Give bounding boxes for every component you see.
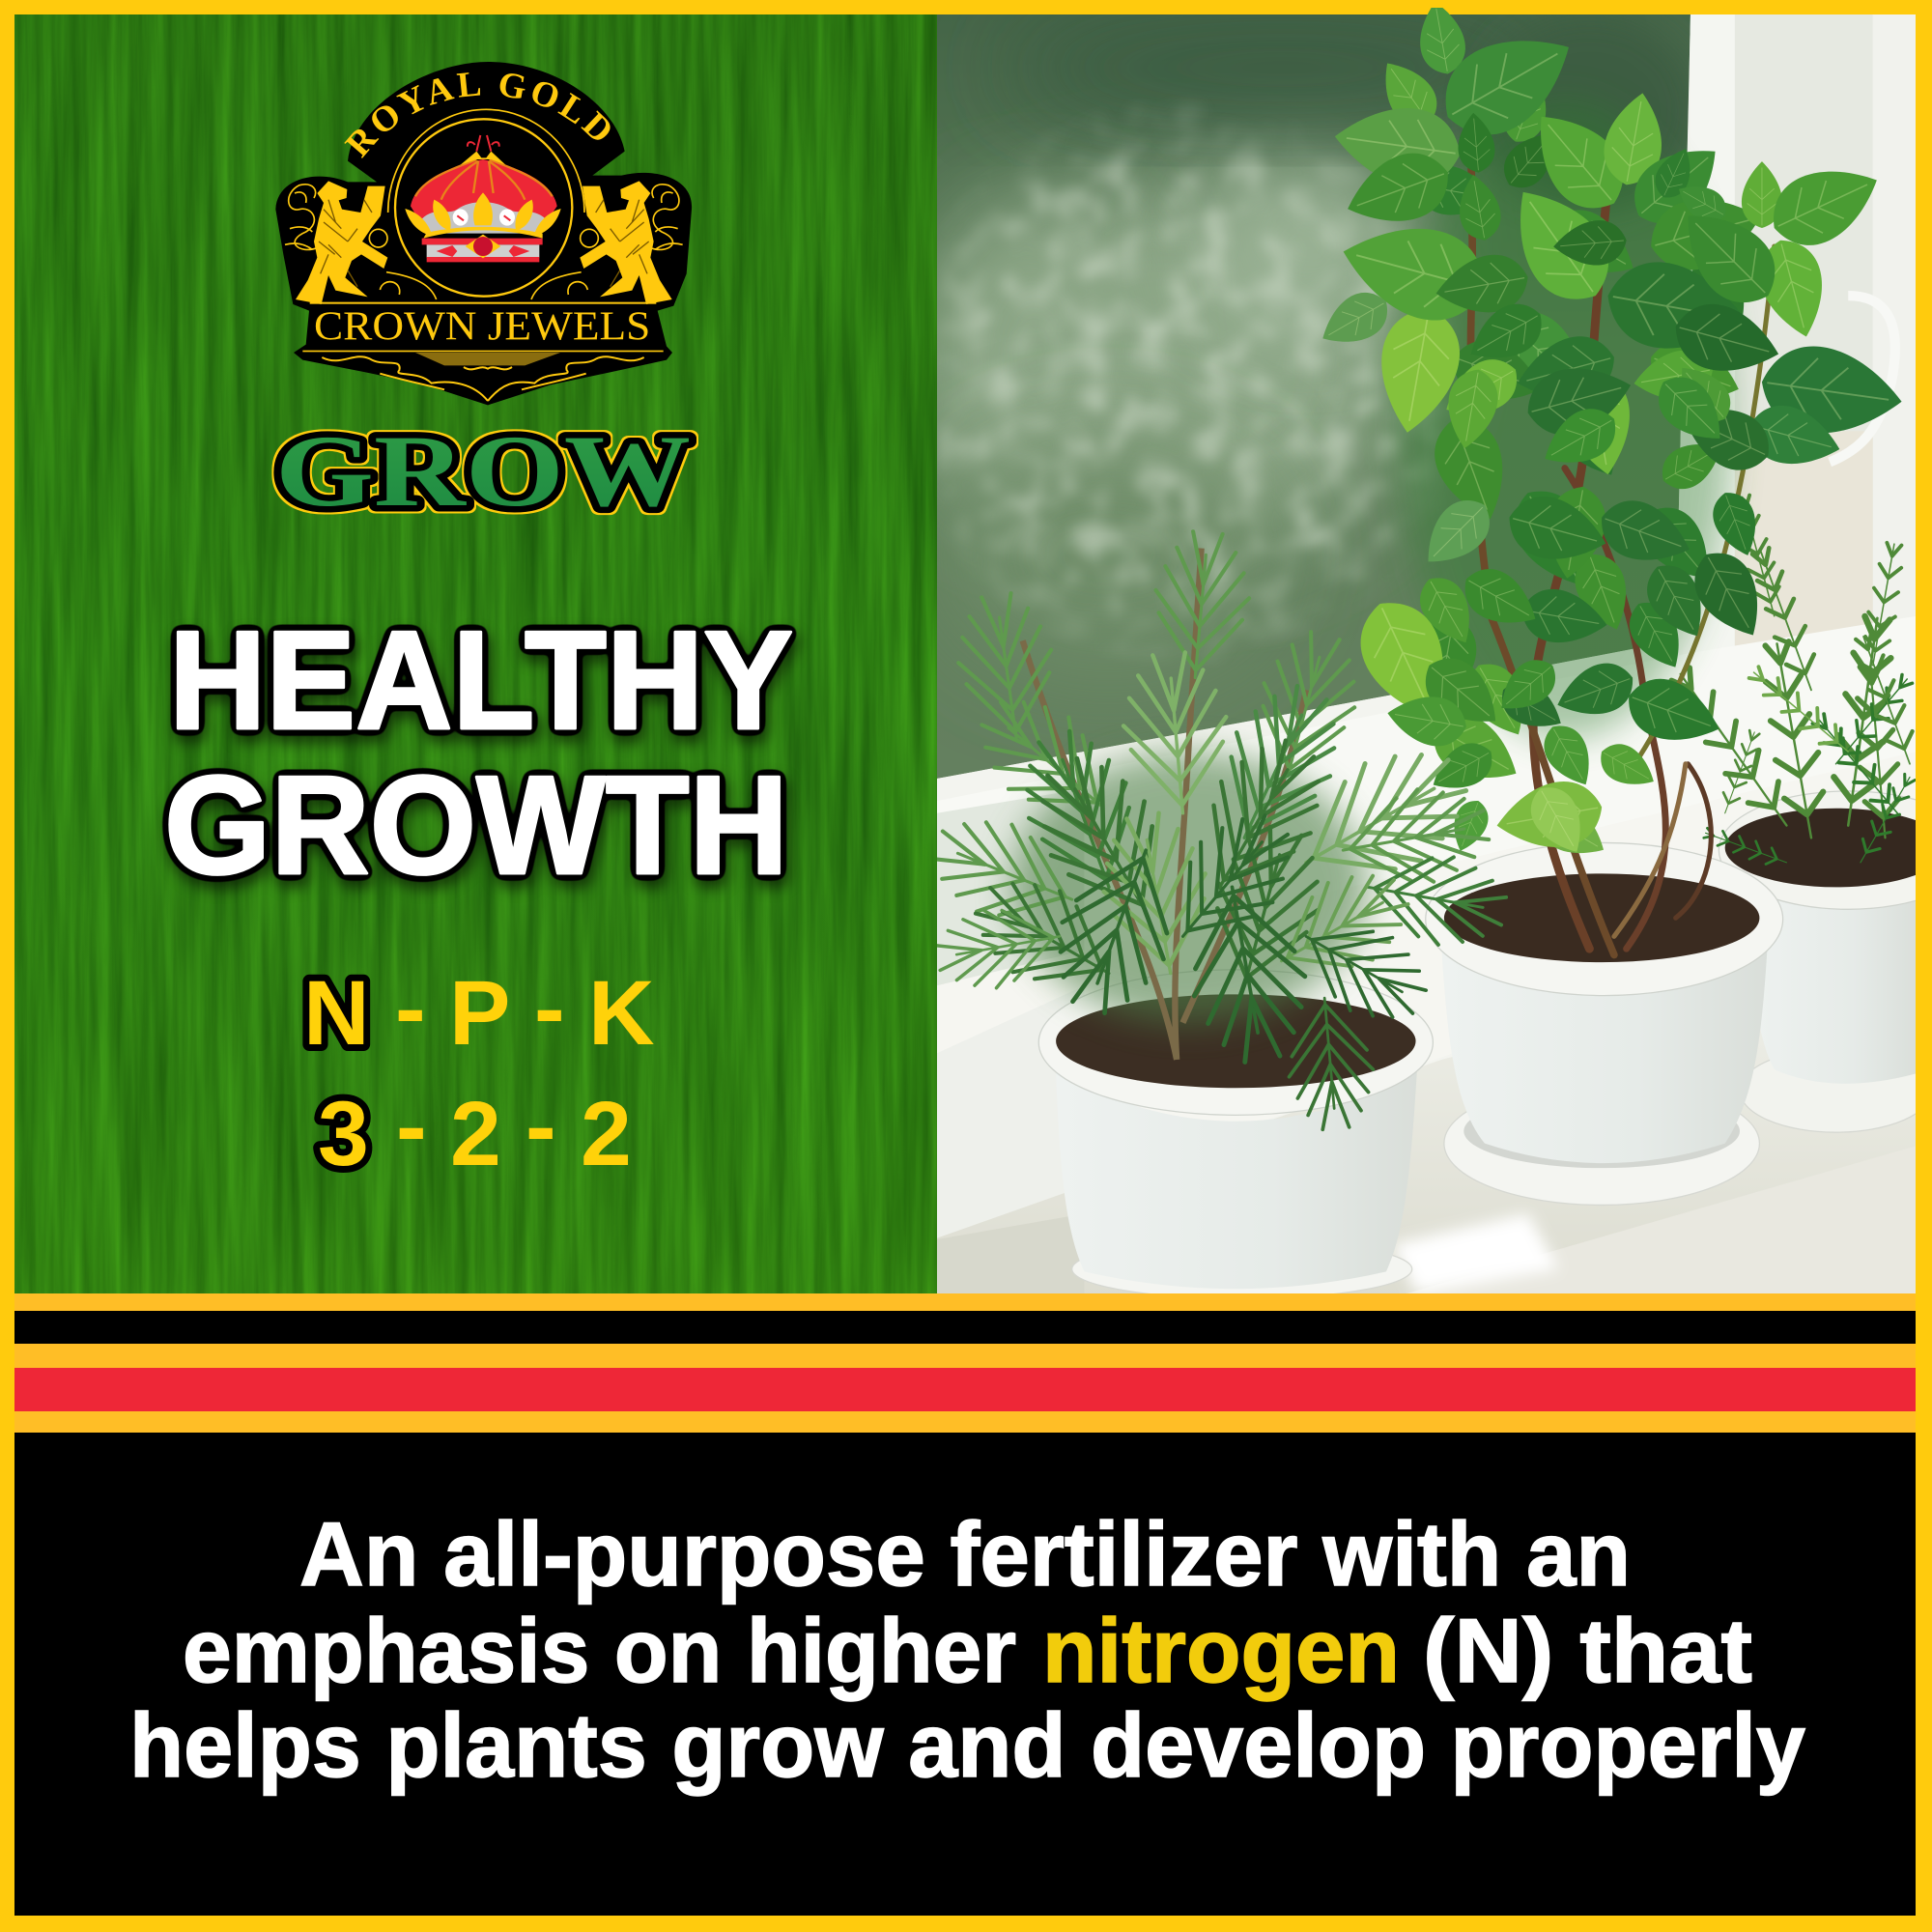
- heading: HEALTHY GROWTH: HEALTHY: [169, 602, 793, 758]
- NPK ratio: 2: [581, 1083, 632, 1185]
- right lion: [531, 181, 683, 304]
- plant: mint backing mass: [1399, 99, 1731, 739]
- plant: thyme: [1663, 494, 1924, 871]
- logo divider rules: [302, 302, 664, 352]
- logo arched name: ROYAL GOLD: [344, 72, 611, 158]
- NPK label: P: [449, 962, 510, 1065]
- plant: rosemary: [920, 528, 1512, 1132]
- window frame and sill: [936, 14, 1922, 1302]
- logo flourish: [322, 353, 644, 401]
- NPK label: -: [534, 957, 565, 1060]
- NPK ratio: -: [526, 1075, 556, 1178]
- heading: HEALTHY GROWTH: [164, 602, 793, 903]
- logo wordmark: CROWN JEWELS: [314, 305, 650, 350]
- caption text: An all-purpose fertilizer with an: [299, 1503, 1631, 1605]
- pot: rosemary: [1038, 970, 1433, 1298]
- logo black badge: [275, 62, 692, 405]
- NPK label: [303, 957, 655, 1065]
- caption text: [129, 1503, 1805, 1796]
- panel: black caption: [14, 1433, 1916, 1916]
- NPK label: K: [588, 962, 655, 1065]
- NPK ratio: [318, 1075, 632, 1185]
- plant: mint stems: [1466, 86, 1775, 955]
- pot: thyme: [1719, 791, 1932, 1132]
- NPK ratio: 2: [450, 1083, 501, 1185]
- logo rings: [388, 109, 584, 297]
- left lion: [285, 181, 437, 304]
- crown: [405, 135, 561, 262]
- NPK ratio: -: [396, 1075, 427, 1178]
- panel: window photo with potted herbs: [920, 0, 1932, 1302]
- NPK label: N: [303, 962, 370, 1065]
- panel: green wood background: [14, 14, 937, 1293]
- heading: GROW: GROW: [275, 414, 691, 527]
- stripes band: [14, 1293, 1916, 1433]
- caption text: (N) that: [1423, 1600, 1752, 1701]
- plant: mint leaves: [1312, 0, 1908, 869]
- caption text: emphasis on higher: [183, 1600, 1016, 1701]
- NPK ratio: 3: [318, 1083, 369, 1185]
- blurred garden through glass: [936, 13, 1700, 779]
- NPK label: -: [395, 957, 426, 1060]
- logo: Royal Gold Crown Jewels: [275, 62, 692, 406]
- caption text: helps plants grow and develop properly: [129, 1694, 1805, 1796]
- heading: HEALTHY GROWTH: GROWTH: [164, 747, 788, 903]
- caption text: nitrogen: [1042, 1600, 1400, 1701]
- pot: mint: [1426, 842, 1783, 1205]
